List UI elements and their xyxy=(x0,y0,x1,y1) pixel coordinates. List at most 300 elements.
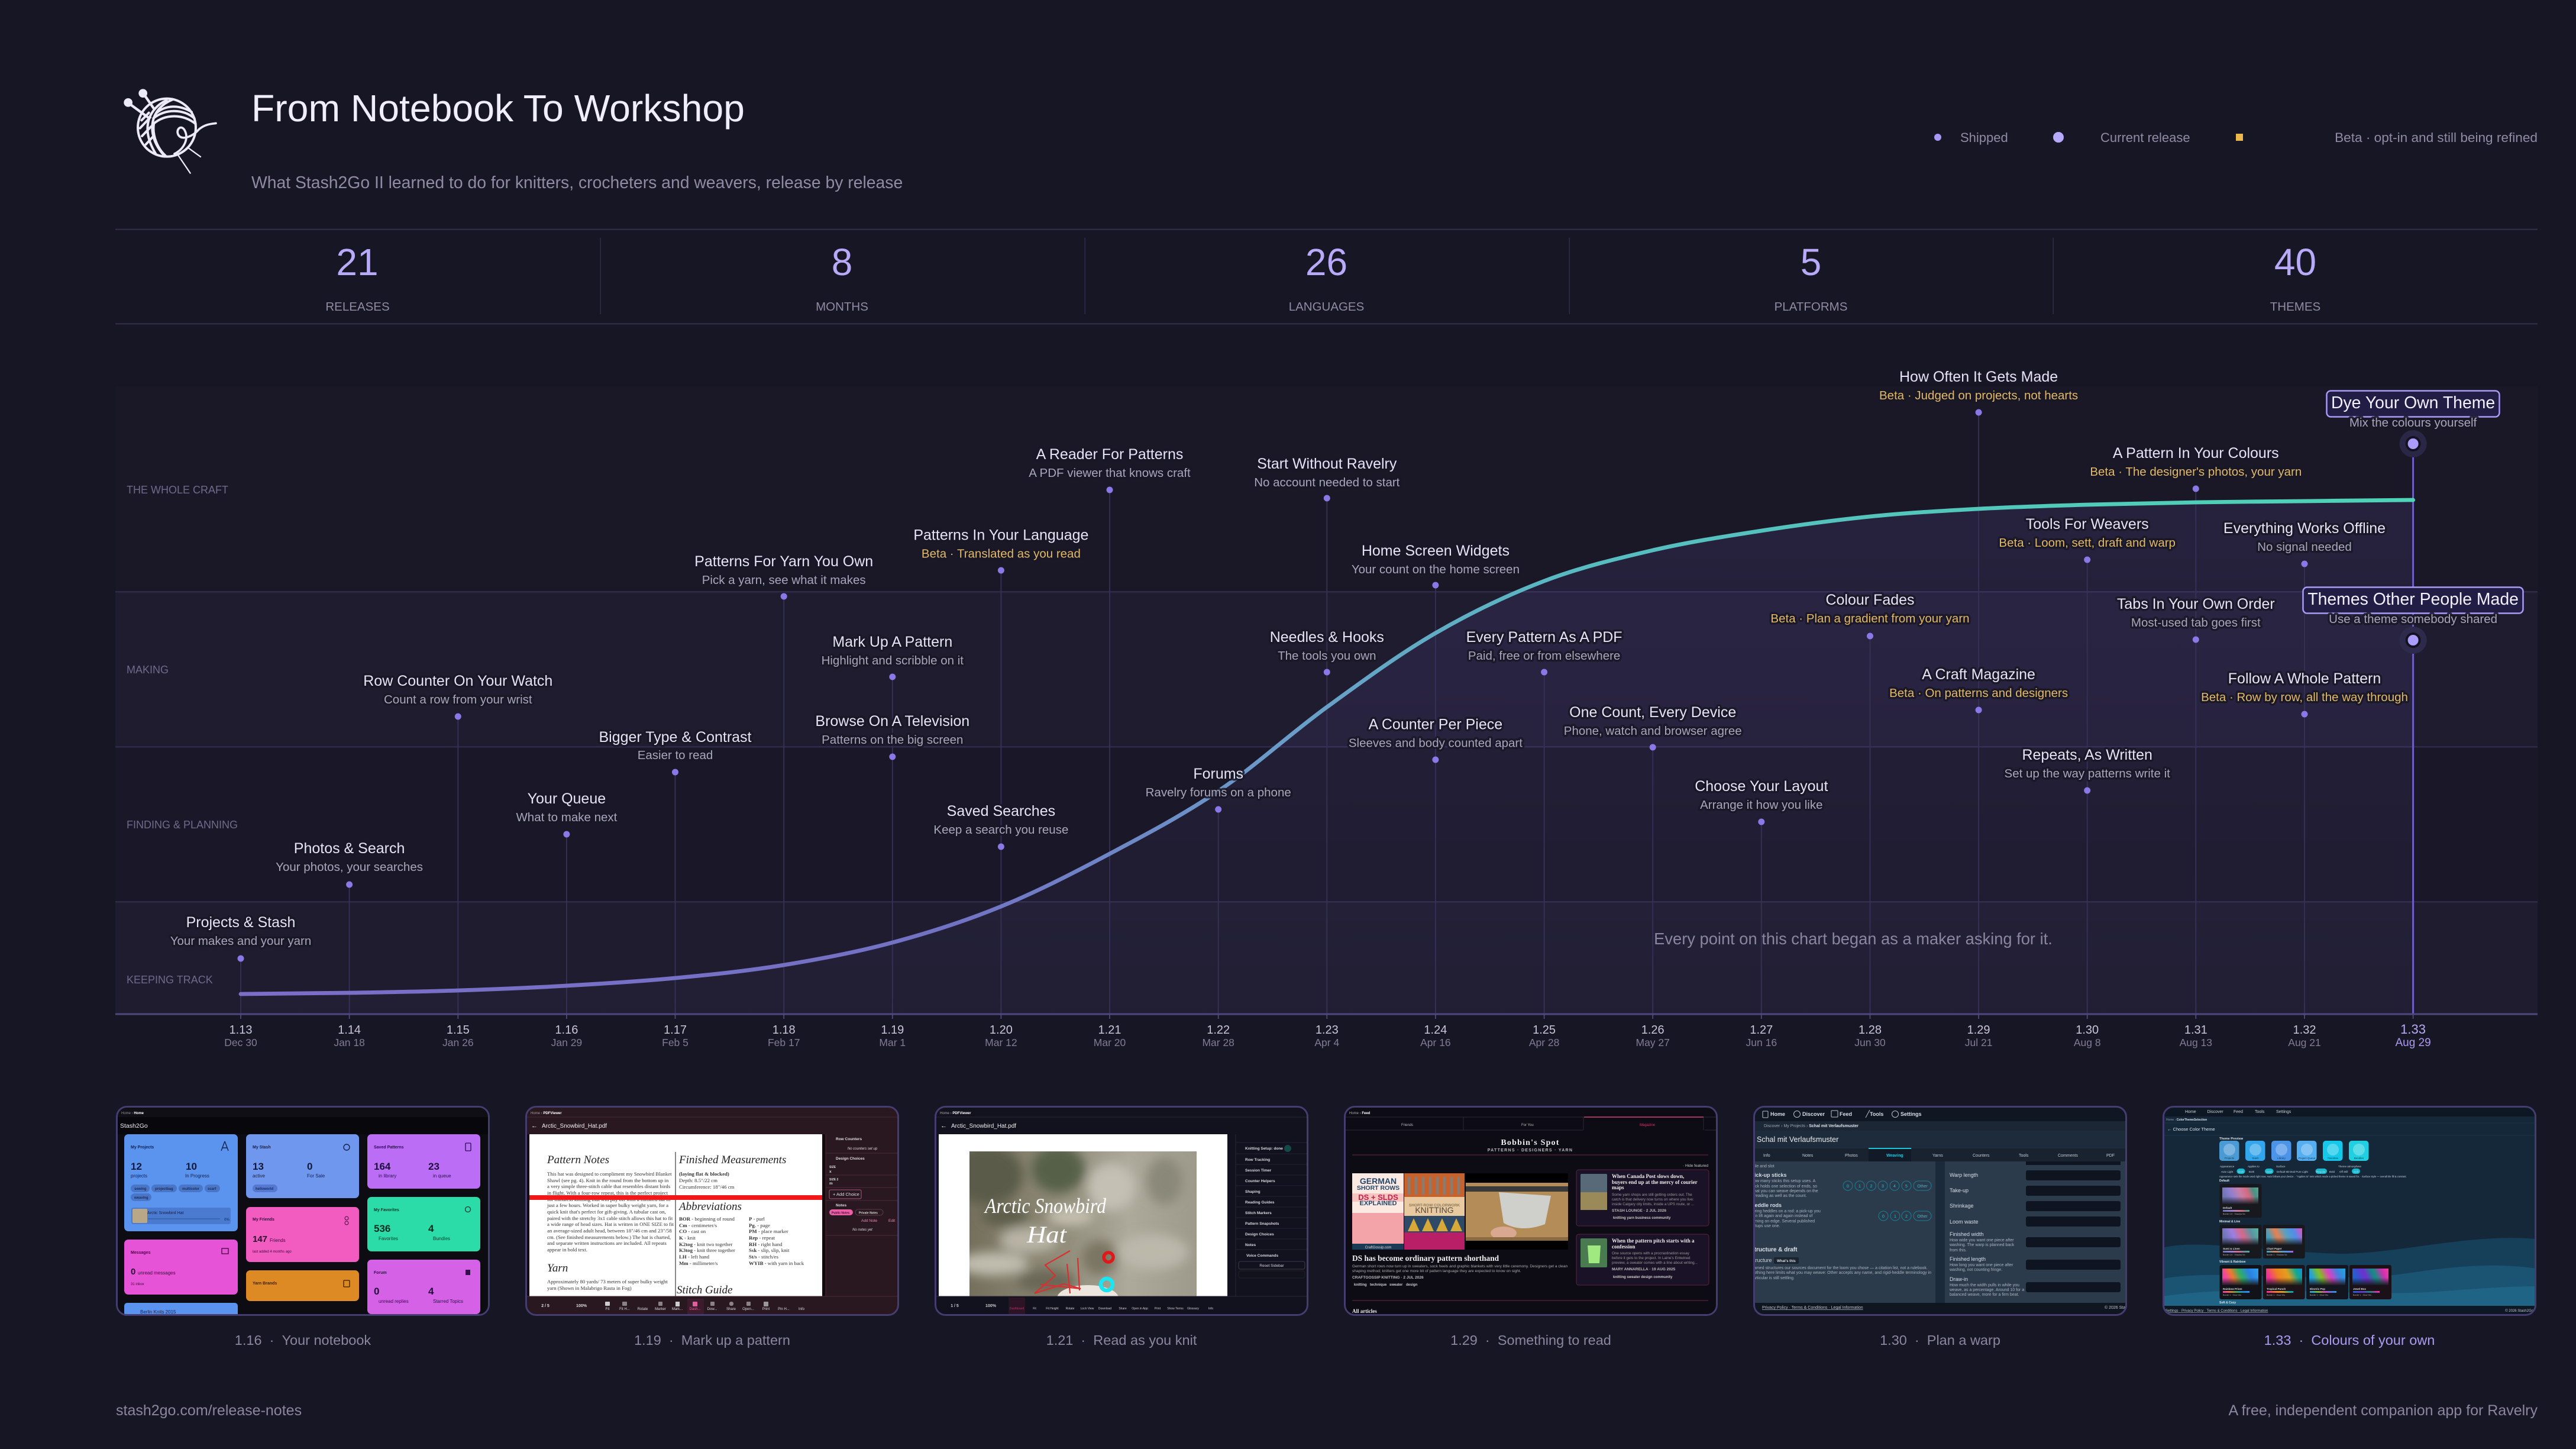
card: Saved Patterns: in queue xyxy=(433,1173,451,1179)
milestone: Patterns For Yarn xyxy=(694,553,873,600)
card: Yarn Brands: Yarn Brands xyxy=(253,1282,277,1286)
screenshot: 1.29 something to read: Friends xyxy=(1401,1124,1413,1127)
milestone: Forums: Forums xyxy=(1193,766,1243,782)
footer bar: Privacy Policy · Terms & Conditions · Legal Information xyxy=(1762,1306,1863,1310)
sidebar: Edit xyxy=(888,1219,895,1223)
structure panel: Nothing here limits what you may weave: Other accepts any name, and rigid-heddle terminology in xyxy=(1751,1271,1931,1275)
theme card: Electric Pop: Electric Pop xyxy=(2310,1287,2325,1290)
setup panel: How many sticks this setup uses. A xyxy=(1751,1179,1816,1183)
x axis labels: 1.21 xyxy=(1098,1024,1121,1037)
tabs: Weaving xyxy=(1886,1154,1903,1158)
x axis labels: Jun 30 xyxy=(1854,1037,1886,1048)
x axis labels: Aug 29 xyxy=(2395,1037,2431,1049)
tools sidebar: Row Tracking xyxy=(1245,1158,1270,1162)
side article 1: inside Calgary city limits, inside a UPS route, or ... xyxy=(1612,1202,1695,1206)
x axis labels xyxy=(224,1022,2431,1049)
card: My Stash: My Stash xyxy=(253,1145,271,1150)
milestone: How Often It Gets Made: Beta · Judged on projects, not hearts xyxy=(1879,389,2078,402)
toolbar: Open in App xyxy=(1132,1307,1148,1311)
pdf page: Mm - millimeter/s xyxy=(679,1260,718,1266)
x axis labels: Jan 18 xyxy=(334,1037,365,1048)
pdf page: St/s - stitch/es xyxy=(749,1254,778,1260)
pdf page: for mindless knitting that will pay off with a finished hat in xyxy=(547,1196,671,1202)
pdf page: cm. (See finished measurements below.) The hat is charted, xyxy=(547,1234,671,1240)
card: Saved Patterns xyxy=(367,1134,480,1189)
milestone: Dye Your Own Theme (current): Mix the colours yourself xyxy=(2349,416,2477,430)
theme card: Default xyxy=(2219,1184,2262,1218)
milestone: One Count, Every Device xyxy=(1564,704,1742,750)
setup panel: setups use one. xyxy=(1751,1224,1780,1228)
setup panel: what you can weave depends on the xyxy=(1750,1189,1818,1193)
theme card: Tropical Punch xyxy=(2263,1265,2305,1299)
milestone: Browse On A Television: Patterns on the big screen xyxy=(822,733,963,747)
milestone: Tools For Weavers xyxy=(1999,516,2176,563)
plan panel: Draw-in xyxy=(1950,1276,1968,1282)
category labels: KEEPING TRACK xyxy=(127,974,213,986)
milestone: Saved Searches: Keep a search you reuse xyxy=(933,823,1068,837)
toolbar: Glossary xyxy=(1187,1307,1199,1311)
x axis labels: 1.25 xyxy=(1533,1024,1556,1037)
x axis labels: Mar 1 xyxy=(879,1037,906,1048)
card: My Projects: Arctic Snowbird Hat xyxy=(147,1211,184,1215)
card: Messages: 31 inbox xyxy=(131,1283,144,1286)
footer bar: Settings · Privacy Policy · Terms & Conditions · Legal Information xyxy=(2165,1309,2268,1313)
theme card: Default: Border 0.5 · Shadow No xyxy=(2223,1213,2245,1215)
card: Yarn Brands xyxy=(246,1270,359,1301)
tabs xyxy=(1763,1148,2115,1161)
pdf page: Circumference: 18"/46 cm xyxy=(679,1184,735,1190)
theme options: Regular xyxy=(2316,1170,2326,1173)
milestone: Needles & Hooks xyxy=(1270,629,1384,676)
pdf page: Depth: 8.5"/22 cm xyxy=(679,1177,717,1183)
pdf page: This hat was designed to compliment my Snowbird Blanket xyxy=(547,1171,672,1177)
card: My Favorites: Favorites xyxy=(379,1236,398,1241)
pdf page: K2tog - knit two together xyxy=(679,1241,732,1247)
theme preview tiles: Library xyxy=(2277,1157,2286,1160)
axis ticks xyxy=(241,1014,2413,1019)
sidebar: + Add Choice xyxy=(833,1192,859,1197)
card: My Friends: last added 4 months ago xyxy=(253,1250,292,1254)
milestone: Photos & Search xyxy=(276,840,423,888)
screenshot: 1.33 colours of your own xyxy=(2163,1106,2536,1316)
x axis labels: 1.29 xyxy=(1967,1024,1990,1037)
milestone: Mark Up A Pattern: Highlight and scribble on it xyxy=(822,654,964,667)
sidebar: SIZE xyxy=(829,1166,836,1169)
magazine masthead: Bobbin's Spot xyxy=(1501,1138,1560,1147)
setup panel: 1 xyxy=(1859,1185,1861,1189)
x axis labels: 1.20 xyxy=(990,1024,1013,1037)
structure panel: particular is still settling. xyxy=(1751,1276,1795,1280)
chart note: Every point on this chart began as a maker asking for it. xyxy=(1654,930,2053,948)
pdf page: (laying flat & blocked) xyxy=(679,1171,729,1177)
plan panel: from this. xyxy=(1950,1248,1967,1253)
chart bands xyxy=(115,386,2538,1014)
plan panel: Shrinkage xyxy=(1950,1203,1974,1209)
x axis labels: Apr 16 xyxy=(1420,1037,1451,1048)
pdf page: and separate written instructions are included. All repeats xyxy=(547,1240,667,1246)
sidebar: SIZE 2 xyxy=(829,1178,839,1182)
axis line xyxy=(115,1013,2538,1015)
footer bar xyxy=(1753,1303,2138,1316)
x axis labels: 1.17 xyxy=(664,1024,687,1037)
side article 2 xyxy=(1576,1234,1709,1285)
milestone: A Pattern In Your Colours: A Pattern In Your Colours xyxy=(2113,445,2279,462)
x axis labels: Aug 21 xyxy=(2288,1037,2321,1048)
stat: themes: 40 xyxy=(2274,241,2316,283)
theme options: Appearance xyxy=(2220,1165,2235,1168)
toolbar: Marker xyxy=(655,1308,666,1311)
x axis labels: 1.26 xyxy=(1641,1024,1664,1037)
tabs: Photos xyxy=(1845,1154,1858,1158)
side article 1: buyers end up at the mercy of courier xyxy=(1612,1179,1698,1185)
sidebar: Public Notes xyxy=(832,1212,850,1215)
area under curve xyxy=(241,500,2413,1014)
side article 2: MARY ANNARELLA · 19 AUG 2025 xyxy=(1612,1267,1676,1271)
card: Messages xyxy=(124,1240,238,1295)
legend: Shipped xyxy=(1960,130,2008,145)
theme options: Off Still xyxy=(2339,1170,2348,1173)
hero covers: EXPLAINED xyxy=(1360,1200,1397,1207)
structure panel xyxy=(1750,1242,1935,1303)
x axis labels: Apr 4 xyxy=(1314,1037,1339,1048)
pdf page: LH - left hand xyxy=(679,1254,710,1260)
theme preview tiles: Stash xyxy=(2252,1157,2259,1160)
toolbar: Fit xyxy=(606,1308,610,1311)
stat: months: 8 xyxy=(832,241,852,283)
setup panel: Heddle rods xyxy=(1751,1202,1782,1208)
toolbar: 1 / 5 xyxy=(951,1304,959,1308)
milestone: Choose Your Layout: Choose Your Layout xyxy=(1695,778,1828,795)
toolbar: Share xyxy=(1119,1307,1127,1311)
theme card: Tropical Punch: Tropical Punch xyxy=(2267,1287,2286,1290)
pdf page: P - purl xyxy=(749,1216,765,1222)
milestone: A Pattern In Your Colours xyxy=(2090,445,2302,492)
screenshot: 1.16 your notebook xyxy=(116,1106,490,1321)
theme options: Soft xyxy=(2354,1170,2359,1173)
card: Messages: Messages xyxy=(131,1251,151,1255)
milestone: Home Screen Widgets xyxy=(1352,543,1520,588)
plan panel: washing. The warp is planned back xyxy=(1949,1243,2015,1247)
pdf page: K3tog - knit three together xyxy=(679,1247,735,1253)
card: Messages: 0 xyxy=(131,1267,135,1277)
sidebar: Row Counters xyxy=(836,1137,862,1141)
theme options: Dark xyxy=(2267,1170,2273,1173)
milestone: Dye Your Own Theme (current) xyxy=(2327,391,2500,457)
footer: tagline: A free, independent companion app for Ravelry xyxy=(2228,1402,2538,1419)
x axis labels: 1.31 xyxy=(2184,1024,2207,1037)
screenshot: 1.21 read as you knit: Home › PDFViewer xyxy=(940,1112,971,1115)
toolbar: Info xyxy=(1208,1307,1213,1311)
milestone: Tabs In Your Own Order: Tabs In Your Own Order xyxy=(2117,596,2275,612)
pdf cover photo: Hat xyxy=(1026,1221,1067,1248)
stat: releases: 21 xyxy=(336,241,379,283)
card: My Friends: Friends xyxy=(270,1238,286,1243)
milestone: Projects & Stash: Projects & Stash xyxy=(186,914,295,931)
category labels: THE WHOLE CRAFT xyxy=(127,484,228,496)
setup panel: 3 xyxy=(1882,1185,1884,1189)
plan panel: washing, not counting fringe. xyxy=(1949,1268,2002,1272)
x axis labels: May 27 xyxy=(1636,1037,1670,1048)
pdf page: just a few hours. Worked in super bulky weight yarn, for a xyxy=(547,1202,668,1208)
x axis labels: 1.24 xyxy=(1424,1024,1447,1037)
caption: 1.33: 1.33 · Colours of your own xyxy=(2264,1332,2435,1348)
setup panel: threading as well as the count. xyxy=(1751,1194,1807,1198)
milestone: Projects & Stash: Your makes and your yarn xyxy=(170,934,311,948)
screenshot: 1.33 colours of your own: ← Choose Color Theme xyxy=(2167,1127,2215,1132)
x axis labels: 1.19 xyxy=(881,1024,904,1037)
screenshot: 1.30 plan a warp: Settings xyxy=(1901,1111,1922,1117)
setup panel: 0 xyxy=(1847,1185,1849,1189)
card: Forum: Starred Topics xyxy=(433,1299,463,1304)
stat: months: MONTHS xyxy=(816,300,868,314)
lead article: German short rows now turn up in sweaters, sock heels and graphic blankets with very little ceremony. Designers get a clean xyxy=(1352,1264,1568,1269)
card: Saved Patterns: in library xyxy=(379,1173,396,1179)
milestone: Colour Fades: Beta · Plan a gradient from your yarn xyxy=(1770,612,1970,625)
tools sidebar: Stitch Markers xyxy=(1245,1211,1272,1215)
theme options: Bold xyxy=(2329,1170,2335,1173)
card: My Projects: 12 xyxy=(131,1161,142,1172)
stat: languages: 26 xyxy=(1305,241,1347,283)
plan panel: Warp length xyxy=(1950,1172,1978,1178)
milestone: How Often It Gets Made: How Often It Gets Made xyxy=(1899,369,2058,385)
tools sidebar: Shaping xyxy=(1245,1190,1260,1194)
x axis labels: 1.15 xyxy=(447,1024,470,1037)
screenshot: 1.33 colours of your own: Home › ColorThemeSelection xyxy=(2166,1118,2207,1122)
card: My Favorites xyxy=(367,1197,480,1251)
lead article: CRAFTGOSSIP KNITTING · 2 JUL 2026 xyxy=(1352,1276,1424,1280)
toolbar: Open... xyxy=(742,1308,754,1311)
milestone: Every Pattern As A PDF: Paid, free or from elsewhere xyxy=(1468,649,1620,663)
theme card: Jewel Box: Border 1 · Glow Yes xyxy=(2353,1294,2371,1296)
card: Berlin Knits xyxy=(124,1303,238,1316)
milestone: A Reader For Patterns: A Reader For Patterns xyxy=(1036,446,1183,463)
card: Messages: unread messages xyxy=(138,1270,176,1276)
hero covers: CraftGossip.com xyxy=(1365,1246,1391,1250)
milestone: Mark Up A Pattern: Mark Up A Pattern xyxy=(832,634,952,650)
screenshot: 1.29 something to read: Home › Feed xyxy=(1349,1112,1371,1115)
milestone: A Craft Magazine: Beta · On patterns and designers xyxy=(1889,686,2068,700)
x axis labels: 1.23 xyxy=(1316,1024,1339,1037)
screenshot: 1.30 plan a warp: Discover › My Projects › Schal mit Verlaufsmuster xyxy=(1764,1124,1859,1128)
milestone: Browse On A Television: Browse On A Television xyxy=(815,713,969,730)
milestone: Tools For Weavers: Beta · Loom, sett, draft and warp xyxy=(1999,536,2176,550)
icon: yarn ball logo xyxy=(124,89,216,173)
pdf page: Abbreviations xyxy=(678,1200,742,1213)
milestone: Patterns For Yarn: Pick a yarn, see what it makes xyxy=(702,573,866,587)
tools sidebar: Knitting Setup: done xyxy=(1245,1147,1283,1151)
milestone: Row Counter: Count a row from your wrist xyxy=(384,693,532,706)
milestone: Home Screen Widgets: Home Screen Widgets xyxy=(1362,543,1510,559)
milestone: Photos & Search: Your photos, your searches xyxy=(276,860,423,874)
toolbar: Lock View xyxy=(1081,1307,1094,1311)
card: My Stash: helloworld xyxy=(256,1187,273,1191)
milestone: Forums: Ravelry forums on a phone xyxy=(1146,786,1291,799)
footer bar: © 2026 Stash2Go xyxy=(2105,1305,2138,1310)
milestone: Choose Your Layout: Arrange it how you like xyxy=(1700,798,1822,812)
stat: themes xyxy=(2270,241,2320,314)
plan panel: How long you want one piece after xyxy=(1950,1263,2013,1267)
side article 1: Some yarn shops are still getting orders out. The xyxy=(1612,1193,1692,1197)
milestone: Everything Works Offline xyxy=(2223,520,2386,567)
hero covers: KNITTING xyxy=(1415,1205,1454,1215)
screenshot: 1.29 something to read: · Hide featured xyxy=(1683,1164,1708,1168)
caption: 1.29: 1.29 · Something to read xyxy=(1450,1332,1611,1348)
hero covers: SHORT ROWS xyxy=(1357,1185,1399,1192)
card: Forum xyxy=(367,1260,480,1314)
lead article: sweater xyxy=(1389,1283,1403,1287)
pdf page: Stitch Guide xyxy=(677,1284,732,1296)
toolbar xyxy=(525,1296,899,1315)
footer bar xyxy=(2163,1306,2536,1316)
sidebar: Notes xyxy=(836,1203,846,1208)
caption: 1.19: 1.19 · Mark up a pattern xyxy=(634,1332,790,1348)
side article 2: knitting sweater design community xyxy=(1613,1276,1673,1279)
milestone: Colour Fades xyxy=(1770,592,1970,639)
screenshot: 1.21 read as you knit: Arctic_Snowbird_Hat.pdf xyxy=(951,1123,1016,1129)
theme preview tiles: Favorites xyxy=(2328,1157,2339,1160)
milestone: Saved Searches: Saved Searches xyxy=(947,803,1055,819)
theme preview tiles: Project Queue xyxy=(2299,1157,2316,1160)
x axis labels: 1.22 xyxy=(1207,1024,1230,1037)
x axis labels: Aug 13 xyxy=(2180,1037,2212,1048)
milestone: Row Counter xyxy=(363,673,552,719)
x axis labels: Jul 21 xyxy=(1965,1037,1992,1048)
side article 2: When the pattern pitch starts with a xyxy=(1612,1238,1695,1244)
toolbar: 100% xyxy=(576,1304,587,1308)
pdf page: Cm - centimeter/s xyxy=(679,1222,717,1228)
milestone: Patterns In Your Language xyxy=(913,527,1088,574)
screenshot: 1.29 something to read: Magazine xyxy=(1640,1124,1656,1127)
plan panel: weave, as a percentage. Around 10 for a xyxy=(1949,1288,2024,1292)
card: My Favorites: Bundles xyxy=(433,1236,450,1241)
milestone: Choose Your Layout xyxy=(1695,778,1828,825)
structure panel: Structure & draft xyxy=(1750,1247,1798,1253)
setup panel: Other xyxy=(1917,1185,1928,1189)
setup panel xyxy=(1750,1161,1935,1244)
sidebar: x xyxy=(829,1170,832,1174)
pdf page: RH - right hand xyxy=(749,1241,783,1247)
theme card: Chart Paper xyxy=(2263,1225,2305,1258)
card: My Stash: For Sale xyxy=(307,1173,325,1179)
pdf cover photo: Arctic Snowbird xyxy=(984,1194,1107,1218)
screenshot: 1.29 something to read: All articles xyxy=(1352,1308,1377,1314)
title: From Notebook To Workshop xyxy=(251,87,745,130)
setup panel: turning on edge. Several published xyxy=(1751,1219,1815,1224)
lead article: technique xyxy=(1370,1283,1387,1287)
milestone: A Counter Per Piece xyxy=(1349,716,1523,763)
milestone: A Reader For Patterns xyxy=(1029,446,1191,493)
theme options: Default Minimal Pure Light xyxy=(2277,1170,2309,1173)
x axis labels: Feb 17 xyxy=(768,1037,800,1048)
milestone: Everything Works Offline: No signal needed xyxy=(2257,540,2352,554)
pdf page: appear in bold text. xyxy=(547,1247,587,1253)
screenshot: 1.33 colours of your own: Discover xyxy=(2207,1110,2223,1114)
setup panel: String heddles on a rod: a pick-up you xyxy=(1751,1209,1821,1214)
x axis labels: 1.32 xyxy=(2293,1024,2316,1037)
screenshot: 1.33 colours of your own: Vibrant & Rainbow xyxy=(2219,1260,2245,1264)
screenshot: 1.33 colours of your own: Minimal & Line xyxy=(2219,1220,2241,1224)
stat: platforms xyxy=(1775,241,1847,314)
magazine masthead: PATTERNS · DESIGNERS · YARN xyxy=(1488,1148,1573,1153)
screenshot: 1.29 something to read: For You xyxy=(1521,1124,1534,1127)
card: My Friends: 147 xyxy=(253,1234,267,1244)
milestone: Follow A Whole Pattern: Follow A Whole Pattern xyxy=(2228,670,2381,687)
milestone: Patterns In Your Language: Beta · Translated as you read xyxy=(922,547,1081,561)
magazine masthead xyxy=(1352,1138,1708,1300)
toolbar: Rotate xyxy=(1066,1307,1075,1311)
stat strip xyxy=(115,228,2538,324)
card: Forum: 4 xyxy=(428,1286,434,1297)
pdf page: Ssk - slip, slip, knit xyxy=(749,1247,790,1253)
caption: 1.21: 1.21 · Read as you knit xyxy=(1046,1332,1197,1348)
tools sidebar: Reading Guides xyxy=(1245,1200,1275,1205)
pdf page: Yarn xyxy=(547,1262,568,1274)
card: My Projects: multicolor xyxy=(182,1187,200,1191)
screenshot: 1.19 mark up a pattern xyxy=(525,1106,899,1316)
toolbar: Dashboard xyxy=(1010,1307,1024,1311)
lead article: design xyxy=(1406,1283,1418,1287)
toolbar: Dow... xyxy=(707,1308,717,1311)
card: My Stash: 0 xyxy=(307,1161,312,1172)
side article 2: One source opens with a procrastination essay xyxy=(1612,1251,1690,1256)
card: My Favorites: My Favorites xyxy=(374,1208,399,1212)
sidebar: Design Choices xyxy=(836,1157,865,1161)
pdf page: WYIB - with yarn in back xyxy=(749,1260,804,1266)
card: Saved Patterns: Saved Patterns xyxy=(374,1145,404,1150)
milestone: Every Pattern As A PDF xyxy=(1466,629,1622,676)
sidebar: m xyxy=(829,1182,833,1186)
setup panel: stick holds one selection of ends, so xyxy=(1751,1185,1817,1189)
plan panel: balanced weave, more for a firm beat. xyxy=(1950,1293,2019,1297)
category labels: FINDING & PLANNING xyxy=(127,819,238,831)
screenshot: 1.16 your notebook: Stash2Go xyxy=(120,1122,148,1129)
plan panel: How much the width pulls in while you xyxy=(1950,1283,2019,1287)
milestone: Mark Up A Pattern xyxy=(822,634,964,680)
lead article: knitting xyxy=(1354,1283,1367,1287)
pdf page: paired with the stretchy 3x1 cable stitch allows this hat to fit xyxy=(547,1215,673,1221)
side article 1: maps xyxy=(1612,1185,1624,1190)
milestone: Themes Other People Made (current) xyxy=(2303,587,2523,654)
screenshot: 1.33 colours of your own: Soft & Cozy xyxy=(2219,1301,2236,1305)
x axis labels: Jun 16 xyxy=(1746,1037,1777,1048)
tools sidebar: Pattern Snapshots xyxy=(1245,1222,1279,1226)
milestone: One Count, Every Device: Phone, watch and browser agree xyxy=(1564,724,1742,738)
hero covers xyxy=(1352,1173,1568,1250)
milestone: Needles & Hooks: The tools you own xyxy=(1278,649,1376,663)
toolbar: Dash... xyxy=(689,1308,701,1311)
setup panel: 1 xyxy=(1894,1215,1896,1219)
x axis labels: 1.30 xyxy=(2076,1024,2099,1037)
milestone: Themes Other People Made (current): Themes Other People Made xyxy=(2307,590,2519,609)
x axis labels: Apr 28 xyxy=(1529,1037,1559,1048)
screenshot: 1.30 plan a warp: Feed xyxy=(1840,1111,1852,1117)
theme card: Default: Default xyxy=(2223,1206,2232,1209)
setup panel: 2 xyxy=(1905,1215,1908,1219)
footer: release notes link: stash2go.com/release-notes xyxy=(116,1402,302,1419)
card: Saved Patterns: 164 xyxy=(374,1161,391,1172)
milestone: Patterns In Your Language: Patterns In Your Language xyxy=(913,527,1088,543)
milestone: A Pattern In Your Colours: Beta · The designer's photos, your yarn xyxy=(2090,465,2302,479)
plan panel: Take-up xyxy=(1950,1187,1969,1193)
pdf page: Approximately 80 yards/ 73 meters of super bulky weight xyxy=(547,1279,668,1285)
pdf page: Pattern Notes xyxy=(547,1154,609,1166)
x axis labels: 1.18 xyxy=(773,1024,796,1037)
card: My Projects: In Progress xyxy=(185,1173,209,1179)
lead article xyxy=(1352,1254,1568,1287)
milestone: Start Without Ravelry: No account needed to start xyxy=(1254,476,1400,489)
card: My Projects: My Projects xyxy=(131,1145,154,1150)
legend xyxy=(1934,130,2538,145)
